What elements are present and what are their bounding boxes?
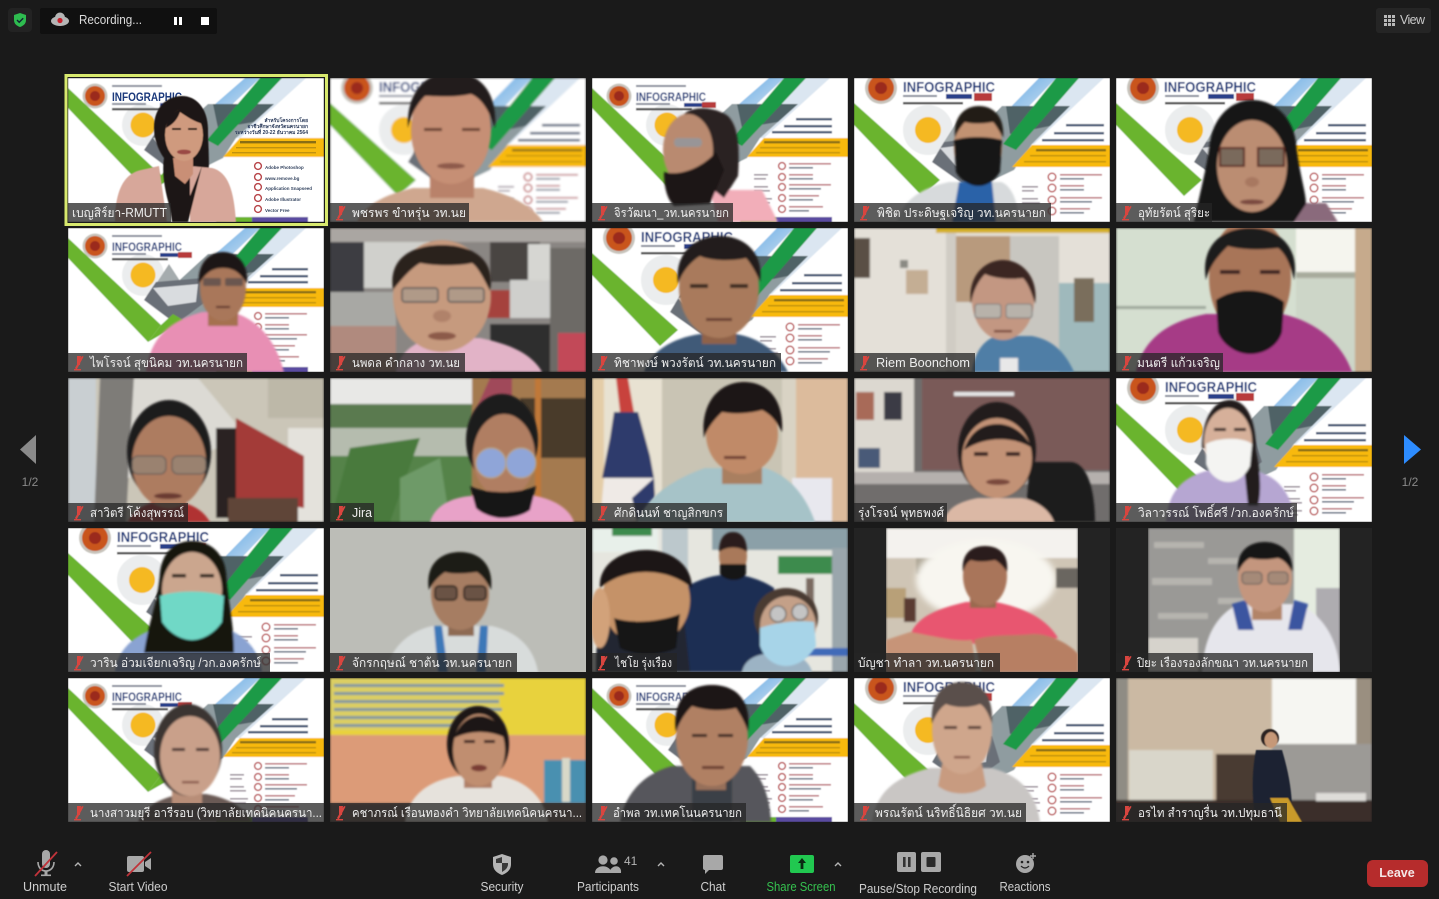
toolbar: pause and stop recording: Pause/Stop Recording — [859, 882, 977, 896]
toolbar: chat: Chat — [700, 880, 726, 894]
tile 1: active speaker — [68, 78, 324, 222]
name label: พรณรัตน์ นริทธิ์นิธิยศ วท.นย — [875, 803, 1022, 820]
name label — [330, 803, 586, 822]
toolbar: security — [480, 854, 524, 894]
leave button — [1367, 860, 1428, 887]
toolbar: share screen: Share Screen — [766, 880, 836, 894]
tile 3 — [592, 78, 848, 222]
name label — [1116, 803, 1287, 822]
name label: จักรกฤษณ์ ชาต้น วท.นครนายก — [352, 656, 512, 670]
recording status bar: Recording... — [79, 13, 142, 27]
tile 17 — [330, 528, 586, 672]
tile 20 — [1116, 528, 1372, 672]
tile 25 — [1116, 678, 1372, 822]
toolbar: participants: Participants — [577, 880, 639, 894]
office wall background — [854, 378, 1110, 522]
participant — [944, 402, 1095, 522]
name label: เบญสิร์ยา-RMUTT — [72, 206, 167, 220]
participant — [386, 552, 538, 672]
participant — [897, 106, 1018, 222]
tile 4 — [854, 78, 1110, 222]
tile 23 — [592, 678, 848, 822]
caret — [75, 863, 81, 866]
view button: View — [1400, 13, 1426, 27]
leave button: Leave — [1379, 866, 1415, 880]
participant — [138, 704, 252, 822]
tile 13 — [592, 378, 848, 522]
name label: ปิยะ เรืองรองลักขณา วท.นครนายก — [1137, 656, 1308, 670]
participant — [115, 541, 262, 672]
name label: บัญชา ทำลา วท.นครนายก — [858, 656, 994, 670]
participant — [1166, 400, 1295, 522]
name label — [592, 803, 746, 822]
toolbar: reactions — [1000, 853, 1050, 894]
tile 1: active speaker: ระหว่างวันที่ 20-22 ธันวาคม 2564 — [235, 128, 308, 136]
next page arrow: 1/2 — [1402, 475, 1419, 489]
participant — [127, 400, 211, 522]
toolbar: participants: 41 — [624, 854, 638, 868]
tile 1: active speaker: สำหรับโครงการโดย — [264, 117, 308, 124]
participant — [146, 252, 284, 372]
participant — [970, 260, 1074, 372]
name label — [854, 353, 975, 372]
tile 5: INFOGRAPHIC — [1164, 79, 1256, 96]
name label: อุทัยรัตน์ สุริยะ — [1138, 206, 1210, 221]
participant — [430, 394, 574, 522]
participant — [620, 685, 771, 822]
toolbar: share screen — [766, 855, 836, 894]
name label — [854, 503, 947, 522]
name label: Riem Boonchom — [876, 356, 970, 370]
name label: วาริน อ่วมเจียกเจริญ /วก.องครักษ์ — [90, 656, 261, 670]
tile 15 — [1116, 378, 1372, 522]
room background — [592, 528, 848, 672]
tile 12 — [330, 378, 586, 522]
name label: ไพโรจน์ สุขนิคม วท.นครนายก — [89, 355, 243, 371]
tile 1: active speaker: Adobe Illustrator — [265, 197, 301, 202]
tile 24: INFOGRAPHIC — [903, 679, 995, 696]
video area — [1148, 528, 1340, 672]
tile 23: INFOGRAPHIC — [636, 690, 706, 704]
name label — [1116, 353, 1223, 372]
name label: นพดล คำกลาง วท.นย — [352, 356, 460, 370]
name label — [330, 653, 517, 672]
tile 8 — [592, 228, 848, 372]
three people — [590, 532, 818, 672]
name label: Jira — [352, 506, 372, 520]
toolbar: security: Security — [480, 880, 524, 894]
participant — [1136, 218, 1352, 372]
tile 18 — [592, 528, 848, 672]
participant — [357, 72, 543, 222]
name label: รุ่งโรจน์ พุทธพงศ์ — [858, 505, 944, 521]
name label — [68, 503, 188, 522]
tile 21: INFOGRAPHIC — [112, 690, 182, 704]
name label — [68, 653, 270, 672]
name label — [330, 503, 374, 522]
toolbar: unmute — [23, 850, 67, 894]
recording status bar — [40, 8, 217, 34]
tile 10 — [1116, 228, 1372, 372]
seated person — [1253, 729, 1302, 822]
participant — [1194, 100, 1338, 222]
caret — [835, 863, 841, 866]
tile 2: INFOGRAPHIC — [379, 79, 471, 96]
toolbar: participants — [577, 854, 639, 894]
video area — [886, 528, 1078, 672]
tile 1: active speaker: www.remove.bg — [264, 176, 300, 181]
name label — [330, 353, 465, 372]
office background — [854, 228, 1110, 372]
name label: ไชโย รุ่งเรือง — [614, 655, 672, 671]
name label: ศักดินนท์ ชาญสิกขกร — [614, 506, 723, 520]
active speaker border — [66, 76, 326, 224]
name label — [1116, 203, 1212, 222]
name label: มนตรี แก้วเจริญ — [1137, 356, 1220, 370]
tile 1: active speaker: Application Snapseed — [265, 186, 312, 191]
room background — [1116, 228, 1372, 372]
name label — [1116, 503, 1297, 522]
tile 9 — [854, 228, 1110, 372]
name label — [68, 353, 247, 372]
name label: พิชิต ประดิษฐเจริญ วท.นครนายก — [877, 206, 1046, 220]
name label — [854, 803, 1026, 822]
name label — [592, 653, 677, 672]
toolbar: pause and stop recording — [859, 852, 977, 896]
tile 24 — [854, 678, 1110, 822]
icon: green security shield — [8, 8, 32, 32]
previous page arrow: 1/2 — [22, 475, 39, 489]
room background — [68, 378, 324, 522]
presenter — [115, 96, 236, 222]
participant — [644, 236, 788, 372]
river background — [330, 378, 586, 522]
toolbar: unmute: Unmute — [23, 880, 67, 894]
name label — [592, 203, 733, 222]
tile 1: active speaker: Vector Free — [265, 208, 290, 213]
participant — [405, 706, 548, 822]
name label: พชรพร ขำหรุ่น วท.นย — [352, 206, 466, 221]
living room — [1116, 678, 1372, 822]
name label: จิรวัฒนา_วท.นครนายก — [614, 206, 729, 220]
tile 16: INFOGRAPHIC — [117, 529, 209, 546]
next page arrow — [1402, 435, 1421, 489]
tile 15: INFOGRAPHIC — [1165, 379, 1257, 396]
name label: วิลาวรรณ์ โพธิ์ศรี /วก.องครักษ์ — [1138, 503, 1294, 520]
toolbar: start video — [108, 852, 168, 894]
tile 8: INFOGRAPHIC — [641, 229, 733, 246]
tile 6: INFOGRAPHIC — [112, 240, 182, 254]
tile 7 — [330, 228, 586, 372]
name label — [1116, 653, 1313, 672]
name label — [854, 203, 1051, 222]
participant — [872, 682, 1040, 822]
caret — [658, 863, 664, 866]
tile 1: active speaker: INFOGRAPHIC — [112, 90, 182, 104]
view button — [1376, 8, 1431, 33]
tile 5 — [1116, 78, 1372, 222]
name label: ทิชาพงษ์ พวงรัตน์ วท.นครนายก — [614, 356, 776, 370]
tile 3: INFOGRAPHIC — [636, 90, 706, 104]
tile 1: active speaker: อาชีวศึกษาจังหวัดนครนายก — [247, 123, 308, 130]
participant — [392, 240, 542, 372]
name label: อรไท สำราญรื่น วท.ปทุมธานี — [1138, 804, 1282, 821]
classroom wall with board — [330, 678, 586, 822]
toolbar: reactions: Reactions — [1000, 880, 1050, 894]
tile 4: INFOGRAPHIC — [903, 79, 995, 96]
tile 11 — [68, 378, 324, 522]
tile 1: active speaker: Adobe Photoshop — [265, 165, 304, 170]
tile 6 — [68, 228, 324, 372]
room with Thai flag — [592, 378, 848, 522]
previous page arrow — [20, 435, 39, 489]
name label: สาวิตรี โค้งสุพรรณ์ — [90, 505, 184, 521]
tile 16 — [68, 528, 324, 672]
name label — [330, 203, 469, 222]
participant — [637, 382, 815, 522]
plain wall — [330, 528, 586, 672]
tile 22 — [330, 678, 586, 822]
toolbar: chat — [700, 855, 726, 894]
name label: อำพล วท.เทคโนนครนายก — [613, 805, 742, 820]
participant — [663, 108, 778, 222]
tile 2 — [330, 78, 586, 222]
tile 14 — [854, 378, 1110, 522]
toolbar: start video: Start Video — [108, 880, 168, 894]
name label — [592, 503, 727, 522]
tile 19 — [854, 528, 1110, 672]
tile 21 — [68, 678, 324, 822]
name label — [592, 353, 781, 372]
room background — [330, 228, 586, 372]
name label — [68, 803, 324, 822]
